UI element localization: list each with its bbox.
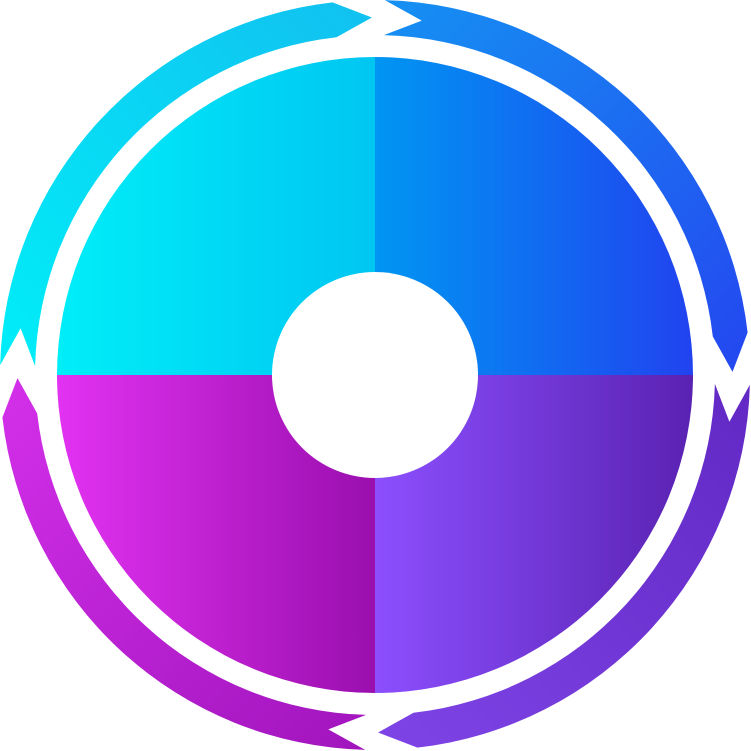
center hole	[272, 272, 478, 478]
quadrant: bottom-right	[375, 375, 693, 693]
quadrant: top-right	[375, 57, 693, 375]
quadrant: bottom-left	[57, 375, 375, 693]
quadrant: top-left	[57, 57, 375, 375]
arrow: top-left cyan	[0, 2, 372, 366]
arrow: top-right blue	[384, 0, 748, 372]
arrow: bottom-left magenta	[2, 378, 366, 750]
arrow: bottom-right purple	[378, 384, 750, 748]
